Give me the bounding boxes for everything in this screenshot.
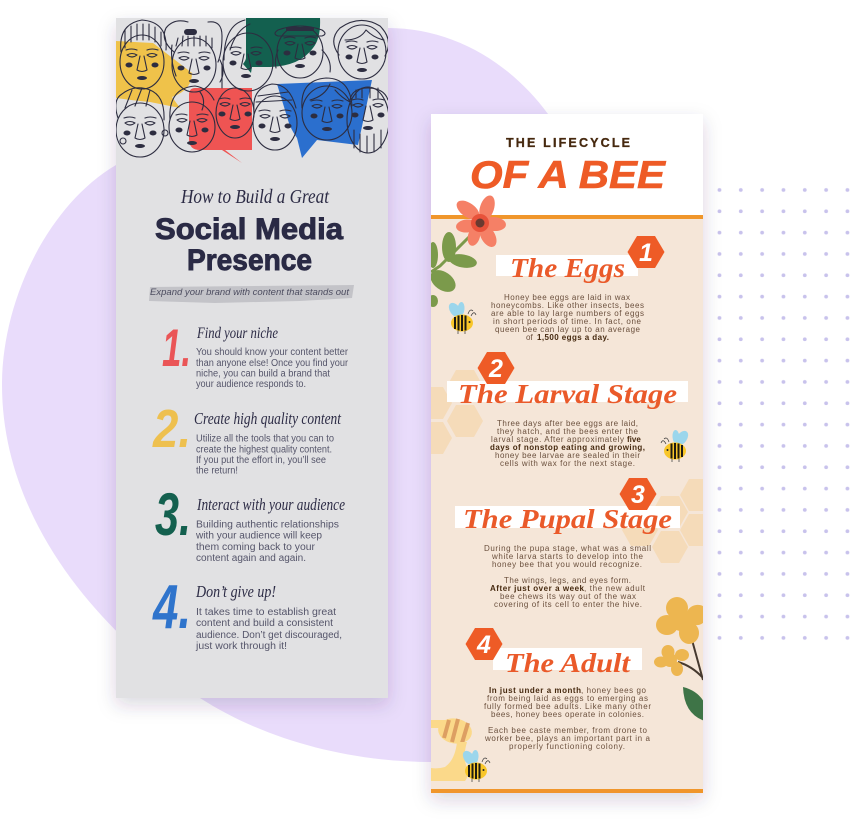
- stage 3: pupal: covering of its cell to enter the hive.: [494, 600, 642, 609]
- bee 3: [460, 749, 490, 782]
- stage 3: pupal: During the pupa stage, what was a small: [484, 544, 651, 553]
- step 3: them coming back to your: [196, 542, 316, 553]
- illustration: orange flower with branch: [426, 193, 507, 307]
- step 3: 3.: [155, 481, 191, 548]
- step 4: just work through it!: [195, 641, 287, 652]
- illustration: crowd of faces: [116, 18, 389, 163]
- panel: bee lifecycle card: [416, 114, 716, 793]
- main title: OF A BEE: [470, 154, 666, 197]
- step 1: Find your niche: [196, 325, 278, 342]
- stage 4: adult: The Adult: [505, 648, 632, 678]
- stage 2: larval: honey bee larvae are sealed in their: [495, 451, 640, 460]
- main title: [155, 213, 343, 277]
- step 1: niche, you can build a brand that: [196, 368, 330, 380]
- dot grid: [709, 179, 858, 649]
- eyebrow title: THE LIFECYCLE: [506, 136, 630, 150]
- header rule: [431, 215, 703, 219]
- step 2: If you put the effort in, you’ll see: [196, 455, 326, 466]
- stage 3: pupal: honey bee that you would recognize.: [492, 560, 642, 569]
- step 2: [152, 399, 342, 476]
- bottom rule: [431, 789, 703, 793]
- stage 3: pupal: white larva starts to develop into the: [491, 552, 644, 561]
- stage 2: larval: larval stage. After approximately: [491, 435, 624, 444]
- hexagon badge 4: [466, 628, 502, 660]
- stage 3: pupal: After just over a week: [490, 584, 585, 593]
- stage 3: pupal: bee chews its way out of the wax: [500, 592, 636, 601]
- stage 1: eggs: [491, 236, 664, 342]
- stage 4: adult: properly functioning colony.: [509, 742, 625, 751]
- stage 2: larval: [447, 352, 688, 468]
- hexagon badge 1: [628, 236, 664, 268]
- stage 1: eggs: Honey bee eggs are laid in wax: [504, 293, 630, 302]
- illustration: honey dipper: [431, 716, 474, 781]
- stage 1: eggs: honeycombs. Like other insects, bees: [491, 301, 644, 310]
- stage 1: eggs: 1,500 eggs a day.: [537, 333, 609, 342]
- honeycomb decorations: [416, 370, 716, 563]
- background blob: [2, 28, 548, 762]
- main title: Social Media: [155, 213, 343, 246]
- step 1: 1.: [162, 319, 191, 378]
- panel: social media card: [116, 18, 389, 698]
- step 3: Interact with your audience: [196, 495, 345, 514]
- stage 2: larval: days of nonstop eating and growing,: [490, 443, 645, 452]
- stage 4: adult: , honey bees go: [581, 686, 647, 695]
- stage 2: larval: five: [627, 435, 641, 444]
- stage 4: adult: from being laid as eggs to emerging as: [487, 694, 648, 703]
- stage 4: adult: worker bee, plays an important part in a: [484, 734, 651, 743]
- illustration: yellow flowers and leaf: [654, 597, 703, 720]
- hexagon badge 3: 3: [631, 481, 645, 509]
- bee 2: [661, 429, 691, 462]
- hexagon badge 2: [478, 352, 514, 384]
- step 3: content again and again.: [196, 553, 306, 564]
- stage 2: larval: cells with wax for the next stage.: [500, 459, 635, 468]
- step 4: content and build a consistent: [196, 618, 333, 629]
- step 3: Building authentic relationships: [196, 520, 339, 530]
- bee 1: [446, 301, 476, 334]
- step 2: Utilize all the tools that you can to: [196, 434, 334, 444]
- stage 3: pupal: , the new adult: [584, 584, 646, 593]
- stage 2: larval: they hatch, and the bees enter the: [497, 427, 639, 436]
- hexagon badge 1: 1: [639, 239, 653, 267]
- stage 1: eggs: of: [526, 333, 533, 342]
- step 4: It takes time to establish great: [196, 607, 336, 618]
- stage 1: eggs: queen bee can lay up to an average: [495, 325, 641, 334]
- stage 4: adult: bees, honey bees operate in colonies.: [491, 710, 644, 719]
- step 2: 2.: [152, 399, 191, 459]
- tagline with brush highlight: [149, 285, 354, 303]
- step 2: Create high quality content: [194, 409, 342, 428]
- stage 3: pupal: The wings, legs, and eyes form.: [504, 576, 631, 585]
- stage 1: eggs: The Eggs: [510, 253, 625, 283]
- tagline with brush highlight: Expand your brand with content that stands out: [150, 287, 349, 298]
- header band: [431, 114, 703, 215]
- step 4: [152, 573, 342, 652]
- step 1: You should know your content better: [196, 347, 349, 358]
- step 3: with your audience will keep: [195, 530, 322, 542]
- step 1: [162, 319, 349, 390]
- stage 1: eggs: are able to lay large numbers of eggs: [491, 309, 644, 318]
- stage 4: adult: [466, 628, 651, 751]
- step 3: [155, 481, 345, 564]
- step 2: create the highest quality content.: [196, 444, 332, 456]
- step 1: than anyone else! Once you find your: [196, 358, 349, 369]
- main title: Presence: [187, 244, 312, 277]
- stage 3: pupal: [455, 478, 680, 609]
- hexagon badge 3: [620, 478, 656, 510]
- step 4: audience. Don’t get discouraged,: [196, 630, 342, 641]
- stage 4: adult: Each bee caste member, from drone to: [488, 726, 648, 735]
- stage 2: larval: The Larval Stage: [458, 379, 677, 409]
- stage 4: adult: fully formed bee adults. Like many other: [484, 702, 651, 711]
- step 4: 4.: [152, 573, 191, 642]
- subtitle script: How to Build a Great: [180, 186, 329, 208]
- stage 2: larval: Three days after bee eggs are laid,: [497, 419, 638, 428]
- step 4: Don’t give up!: [195, 582, 276, 601]
- stage 3: pupal: The Pupal Stage: [463, 504, 672, 534]
- hexagon badge 2: 2: [488, 355, 503, 383]
- hexagon badge 4: 4: [476, 631, 491, 659]
- stage 1: eggs: in short periods of time. In fact, one: [493, 317, 642, 326]
- step 2: the return!: [196, 466, 238, 476]
- stage 4: adult: In just under a month: [489, 686, 581, 695]
- step 1: your audience responds to.: [196, 379, 306, 390]
